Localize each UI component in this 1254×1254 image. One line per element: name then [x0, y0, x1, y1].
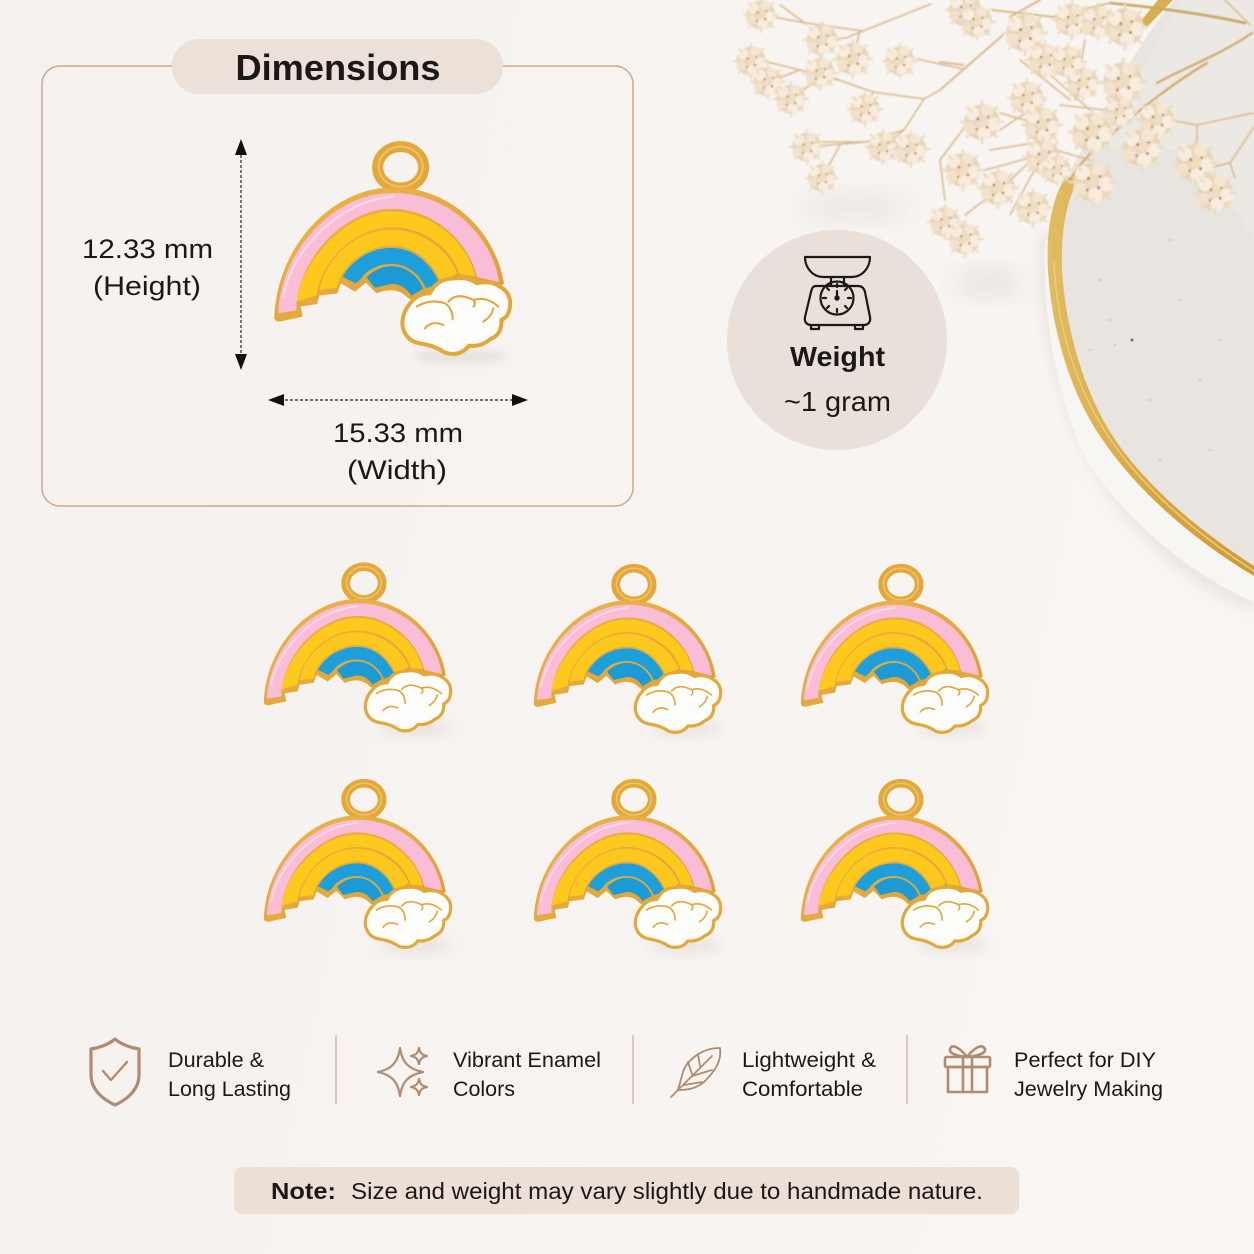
- charm row 1 col 3: [801, 568, 988, 732]
- charm row 1 col 1: [264, 567, 451, 731]
- large rainbow charm: [274, 147, 510, 364]
- weight text: Weight: [790, 341, 885, 372]
- feature: lightweight: Comfortable: [742, 1077, 863, 1101]
- width label: [333, 418, 463, 485]
- height label: [82, 234, 213, 301]
- weight text: [784, 341, 891, 417]
- width arrow: [268, 394, 528, 406]
- icon: shield: [91, 1039, 139, 1105]
- flower clusters: [733, 0, 1237, 258]
- width label: (Width): [347, 455, 447, 485]
- feature: durable: Long Lasting: [168, 1077, 291, 1101]
- charm row 1 col 2: [534, 568, 721, 732]
- feature: durable: [91, 1039, 291, 1105]
- height label: (Height): [93, 271, 201, 301]
- feature: durable: Durable &: [168, 1048, 264, 1072]
- feature: diy: Perfect for DIY: [1014, 1048, 1156, 1072]
- heading pill: Dimensions: Dimensions: [236, 47, 440, 88]
- panel: weight badge: [727, 230, 947, 450]
- feature: vibrant: Colors: [453, 1077, 515, 1101]
- panel: dimensions: [42, 39, 633, 506]
- charm row 2 col 3: [801, 783, 988, 947]
- height arrow: [235, 139, 247, 370]
- charm grid: [264, 567, 988, 953]
- note bar: Size and weight may vary slightly due to handmade nature.: [351, 1178, 983, 1204]
- heading pill: Dimensions: [172, 39, 503, 94]
- charm row 2 col 2: [534, 783, 721, 947]
- feature: vibrant: [378, 1048, 601, 1101]
- plate gold rim: [1048, 176, 1254, 576]
- height label: 12.33 mm: [82, 234, 213, 264]
- icon: feather: [671, 1048, 720, 1097]
- note bar: [234, 1167, 1019, 1214]
- feature: diy: Jewelry Making: [1014, 1077, 1163, 1101]
- feature: lightweight: [671, 1048, 876, 1101]
- note bar: Note:: [271, 1178, 336, 1204]
- icon: kitchen scale: [805, 257, 870, 329]
- feature: lightweight: Lightweight &: [742, 1048, 876, 1072]
- charm row 2 col 1: [264, 783, 451, 947]
- stems: [764, 0, 1254, 215]
- weight text: ~1 gram: [784, 386, 891, 417]
- feature: vibrant: Vibrant Enamel: [453, 1048, 601, 1072]
- photo: plate and dried flowers: [733, 0, 1254, 612]
- width label: 15.33 mm: [333, 418, 463, 448]
- feature: diy: [945, 1046, 1163, 1101]
- features row: [91, 1035, 1163, 1105]
- icon: sparkles: [378, 1048, 427, 1096]
- icon: gift: [945, 1046, 990, 1092]
